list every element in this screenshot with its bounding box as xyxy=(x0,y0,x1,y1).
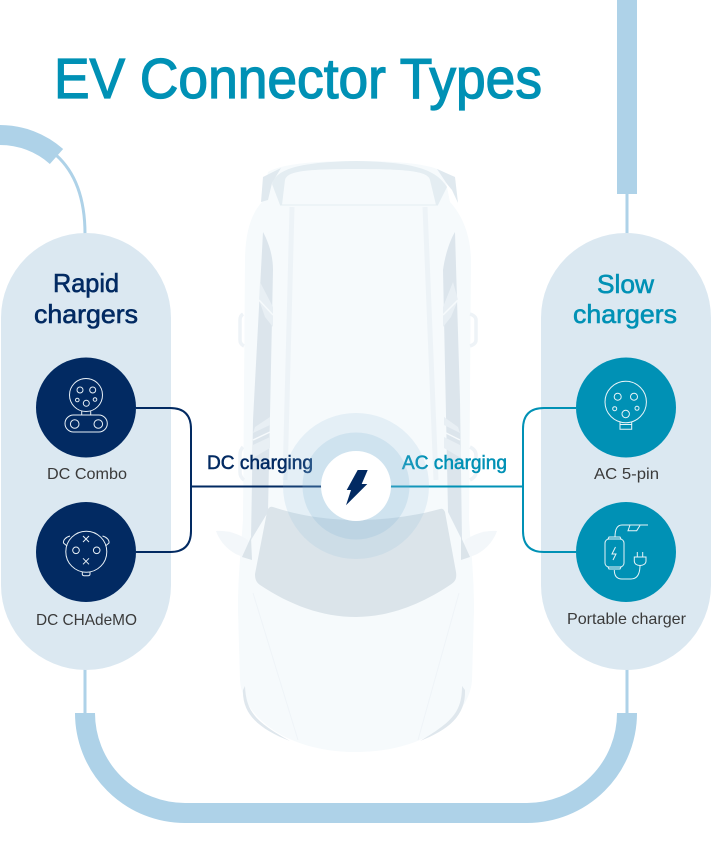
label: AC charging: AC charging xyxy=(402,453,507,474)
icon: AC 5-pin xyxy=(576,358,676,458)
heading: rapid chargers: chargers xyxy=(34,299,138,329)
heading: rapid chargers: Rapid xyxy=(53,268,119,298)
heading: slow chargers: Slow xyxy=(597,269,654,299)
label: DC charging: DC charging xyxy=(207,453,313,474)
DC connector lines xyxy=(136,408,322,552)
icon: lightning bolt xyxy=(346,470,368,505)
charging hub with bolt xyxy=(283,413,429,559)
label: AC 5-pin: AC 5-pin xyxy=(594,466,659,483)
car top view xyxy=(216,161,497,752)
icon: portable charger xyxy=(576,502,676,602)
panel: rapid chargers xyxy=(1,233,171,670)
bottom connector arc xyxy=(84,668,628,813)
icon: DC Combo xyxy=(36,358,136,458)
icon: DC CHAdeMO xyxy=(36,502,136,602)
label: portable charger: Portable charger xyxy=(567,611,687,628)
label: DC CHAdeMO: DC CHAdeMO xyxy=(36,612,137,629)
top left connector arc xyxy=(0,135,85,234)
title: EV Connector Types xyxy=(54,47,542,111)
panel: slow chargers xyxy=(541,233,711,670)
heading: slow chargers: chargers xyxy=(573,299,677,329)
AC connector lines xyxy=(390,408,576,552)
top right connector bar xyxy=(617,0,637,234)
label: DC Combo: DC Combo xyxy=(47,466,127,483)
